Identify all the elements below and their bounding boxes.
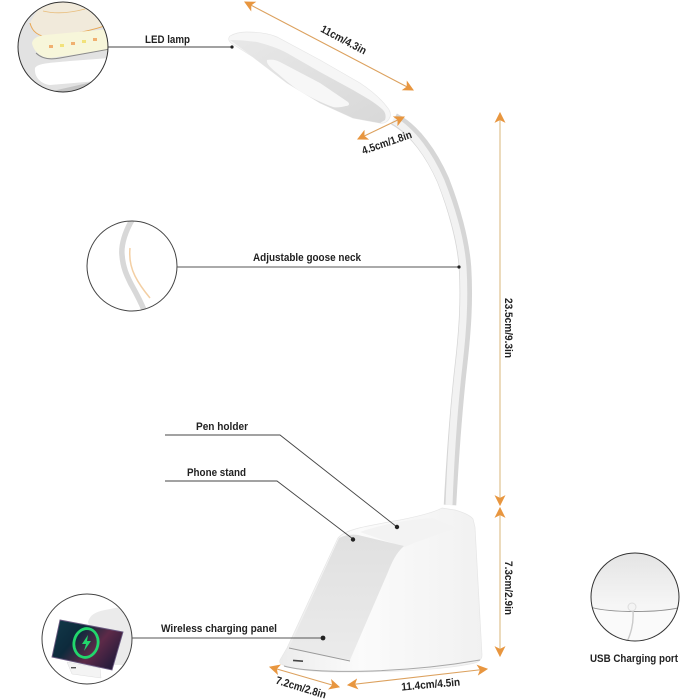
lamp head (229, 32, 390, 123)
label: Wireless charging panel: Wireless charging panel (161, 623, 277, 635)
leader line: Wireless charging panel (132, 636, 325, 640)
zoom circle: USB port (590, 553, 682, 645)
label: USB Charging port: USB Charging port (590, 653, 678, 665)
zoom circle: phone charging (42, 594, 134, 684)
leader line: LED lamp (108, 45, 234, 49)
dimension: 23.5cm/9.3in: 23.5cm/9.3in (502, 298, 514, 358)
label: LED lamp: LED lamp (145, 34, 190, 46)
dimension: 11.4cm/4.5in: 11.4cm/4.5in (401, 676, 461, 694)
base shadow (284, 660, 480, 671)
dimension: 11cm/4.3in (245, 2, 413, 90)
dimension: 4.5cm/1.8in (358, 117, 414, 157)
leader line: goose neck (177, 265, 461, 269)
callout: Adjustable goose neck (87, 220, 461, 311)
dimension: 11.4cm/4.5in (348, 669, 487, 694)
label: Phone stand: Phone stand (187, 467, 246, 479)
dimension: 11cm/4.3in: 11cm/4.3in (319, 23, 369, 58)
usb slot (293, 660, 303, 662)
callout: Wireless charging panel (42, 594, 325, 684)
panel ledge (289, 648, 350, 661)
dimension: 7.2cm/2.8in (270, 667, 339, 700)
goose neck (393, 119, 466, 505)
zoom circle: LED lamp (18, 0, 110, 95)
cup opening (360, 518, 457, 547)
zoom circle: goose neck (87, 220, 177, 311)
dimension: 7.3cm/2.9in: 7.3cm/2.9in (502, 561, 514, 615)
base body (280, 508, 482, 672)
leader line: Phone stand (165, 481, 355, 542)
callout: Pen holder (165, 421, 399, 529)
callout: LED lamp (18, 0, 234, 95)
dimension: 4.5cm/1.8in: 4.5cm/1.8in (360, 129, 414, 157)
base (280, 508, 482, 672)
callout: USB Charging port (590, 553, 682, 665)
label: Adjustable goose neck: Adjustable goose neck (253, 252, 362, 264)
callout: Phone stand (165, 467, 355, 542)
phone stand panel (289, 535, 404, 660)
label: Pen holder: Pen holder (196, 421, 249, 433)
leader line: Pen holder (165, 435, 399, 529)
